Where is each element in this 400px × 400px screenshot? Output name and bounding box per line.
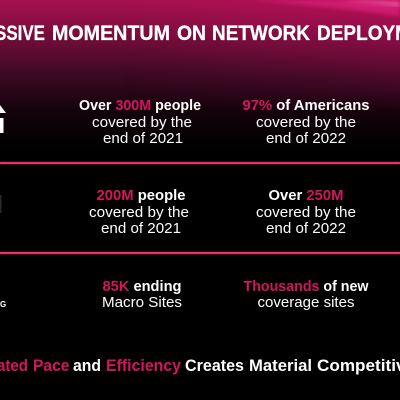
row 1 column 2 stat: covered by the: [256, 114, 356, 131]
bottom takeaway: Efficiency: [106, 356, 182, 375]
left fragment: row 2 logo glyph: [0, 195, 2, 213]
row 2 column 1 stat: covered by the: [89, 204, 189, 221]
row 2 divider: [0, 252, 400, 254]
title: [0, 22, 400, 45]
title: ON: [177, 22, 206, 45]
row 3 column 2 stat: Thousands of new: [244, 279, 369, 295]
title: MOMENTUM: [52, 22, 170, 45]
row 1 column 1 stat: covered by the: [92, 114, 192, 131]
bottom takeaway: Pace: [33, 356, 70, 375]
background gradient: [0, 0, 400, 134]
row 1 column 1 stat: end of 2021: [103, 130, 183, 147]
bottom takeaway: Material: [249, 356, 312, 375]
row 2 column 1 stat: [89, 188, 189, 237]
row 1 column 2 stat: 97% of Americans: [242, 98, 370, 114]
row 3 column 1 stat: [102, 279, 182, 311]
row 2 column 1 stat: 200M people: [96, 188, 185, 204]
row 3 column 2 stat: [244, 279, 369, 311]
bottom takeaway: Creates: [185, 356, 244, 375]
row 1 column 1 stat: [79, 98, 201, 147]
row 3 column 2 stat: coverage sites: [258, 294, 354, 311]
row 2 column 2 stat: [256, 188, 356, 237]
bottom takeaway: and: [73, 356, 101, 375]
row 2 column 2 stat: Over 250M: [268, 188, 344, 204]
row 1 column 2 stat: [242, 98, 370, 147]
row 2 column 2 stat: end of 2022: [266, 220, 346, 237]
row 2 column 1 stat: end of 2021: [101, 220, 181, 237]
row 1 column 2 stat: end of 2022: [266, 130, 346, 147]
row 3 column 1 stat: 85K ending: [102, 279, 182, 295]
row 3 column 1 stat: Macro Sites: [102, 294, 182, 311]
row 1 column 1 stat: Over 300M people: [79, 98, 201, 114]
left fragment: row 3 label glyph: G: [0, 300, 6, 309]
bottom takeaway: [0, 356, 400, 375]
left fragment: row 1 logo glyph: [0, 105, 6, 133]
row 1 divider: [0, 162, 400, 164]
title: NETWORK: [212, 22, 310, 45]
row 2 column 2 stat: covered by the: [256, 204, 356, 221]
